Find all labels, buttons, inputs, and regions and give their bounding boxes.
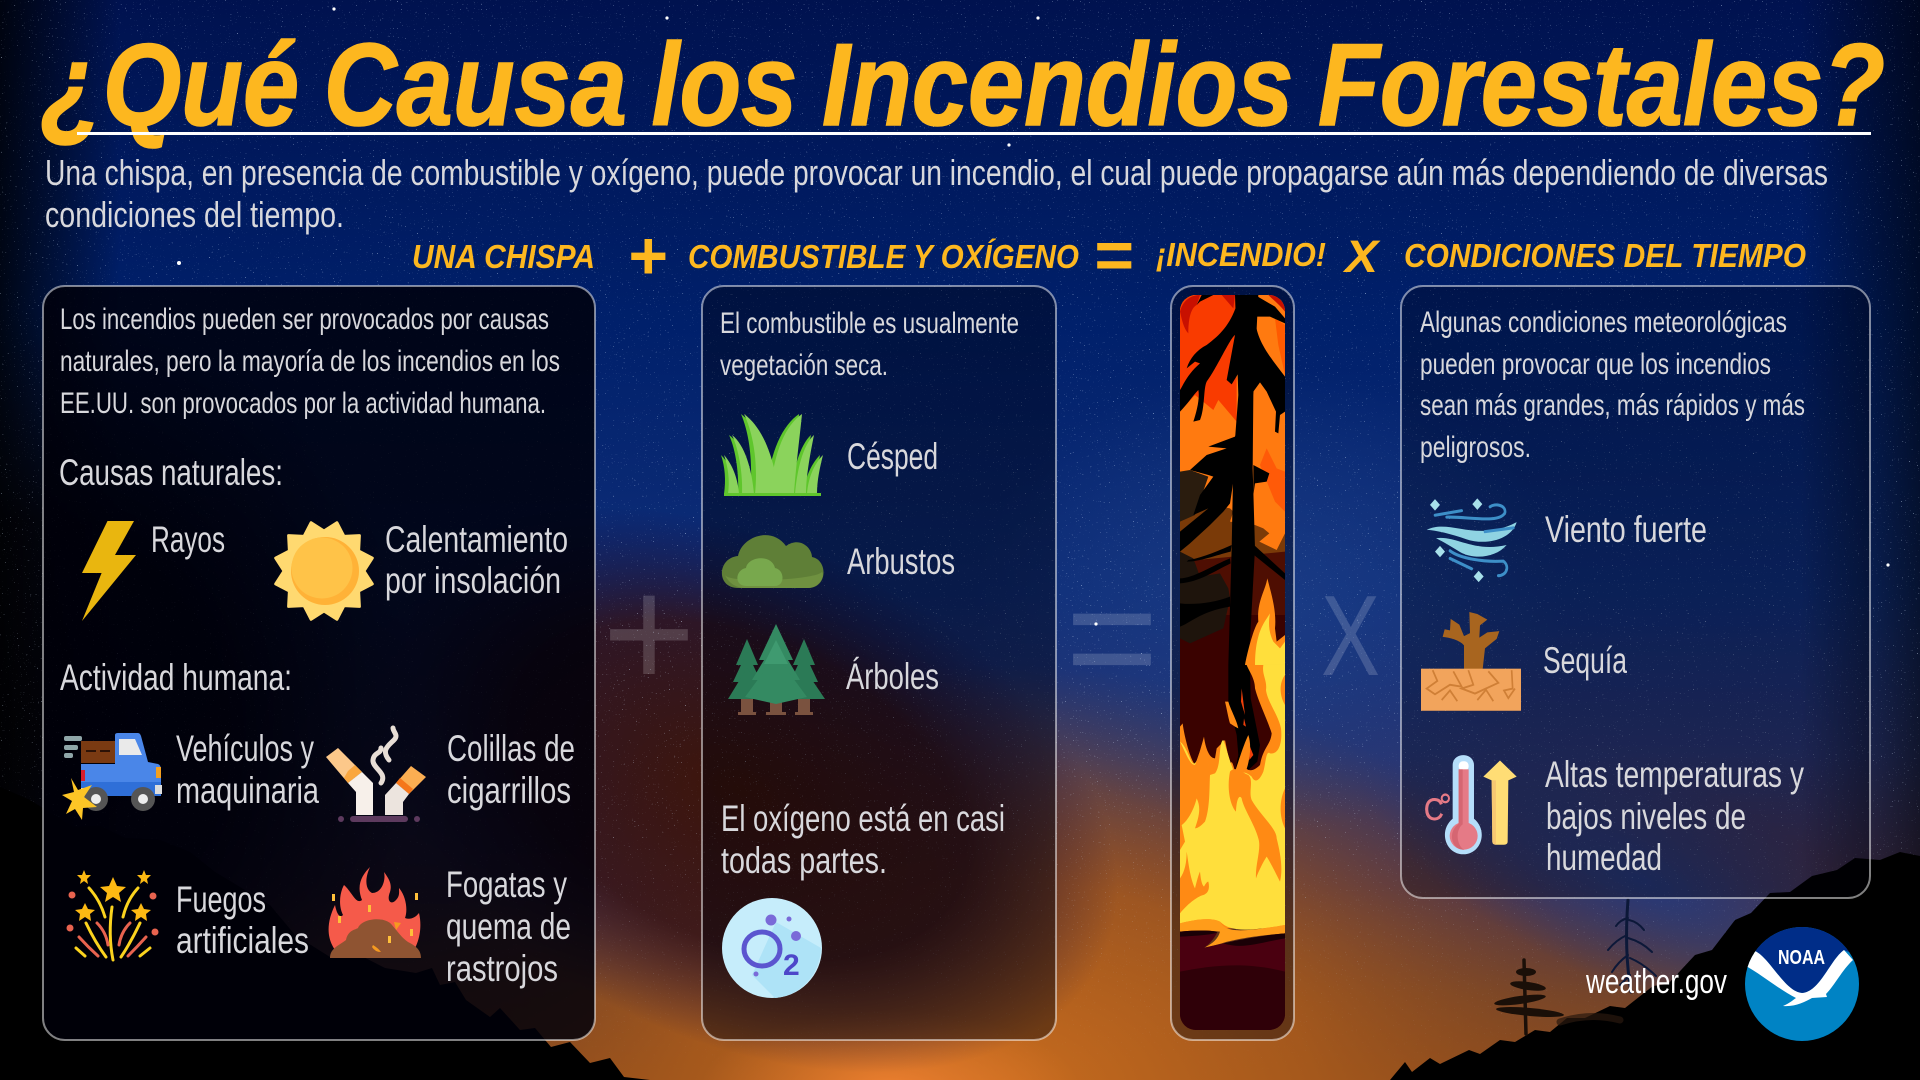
label: sequía: Sequía	[1543, 640, 1627, 681]
weather paragraph: pueden provocar que los incendios	[1420, 348, 1771, 381]
label: fuegos artificiales	[176, 879, 309, 961]
equation heading row: X	[1342, 231, 1381, 282]
label: fuegos artificiales: Fuegos	[176, 879, 266, 920]
weather paragraph: Algunas condiciones meteorológicas	[1420, 306, 1787, 339]
fuel paragraph: El combustible es usualmente	[720, 307, 1019, 340]
icon: burning debris pile	[329, 867, 421, 958]
icon: wind	[1427, 498, 1517, 582]
label: altas temperaturas y bajos niveles de humedad	[1545, 754, 1804, 878]
intro paragraph: causes	[60, 303, 560, 420]
logo: NOAA	[1740, 927, 1862, 1041]
heading: actividad humana: Actividad humana:	[60, 657, 292, 698]
label: vehículos y maquinaria: Vehículos y	[176, 728, 314, 769]
mountain silhouettes	[0, 787, 1920, 1080]
icon: oxygen molecule: 2	[783, 949, 800, 982]
panel: combustible y oxígeno	[702, 286, 1056, 1040]
website label: weather.gov	[1585, 963, 1727, 1001]
intro paragraph: causes: Los incendios pueden ser provocados por causas	[60, 303, 549, 336]
icon: sun	[276, 523, 372, 619]
heading: causas naturales: Causas naturales:	[59, 452, 283, 493]
label: viento fuerte: Viento fuerte	[1545, 509, 1707, 550]
icon: cigarette butts	[326, 728, 426, 822]
icon: thermometer and arrow: C	[1424, 792, 1444, 827]
intro paragraph: causes: naturales, pero la mayoría de los incendios en los	[60, 345, 560, 378]
icon: oxygen molecule	[722, 898, 822, 998]
large equals sign between panels: =	[1065, 547, 1159, 726]
intro paragraph: causes: EE.UU. son provocados por la actividad humana.	[60, 387, 546, 420]
icon: thermometer and arrow	[1424, 755, 1517, 854]
large plus sign between panels: +	[602, 543, 696, 722]
oxygen paragraph	[721, 798, 1005, 881]
label: colillas de cigarrillos: cigarrillos	[447, 770, 571, 811]
title underline	[77, 132, 1871, 135]
label: altas temperaturas y bajos niveles de humedad: humedad	[1546, 837, 1662, 878]
logo: NOAA: NOAA	[1778, 947, 1825, 969]
icon: grass	[721, 414, 823, 496]
label: altas temperaturas y bajos niveles de humedad: Altas temperaturas y	[1545, 754, 1804, 795]
equation heading row: CONDICIONES DEL TIEMPO	[1404, 237, 1806, 274]
panel: condiciones del tiempo	[1401, 286, 1870, 898]
tree: right snag	[1608, 900, 1656, 992]
equation heading row: COMBUSTIBLE Y OXÍGENO	[688, 238, 1079, 275]
label: árboles: Árboles	[846, 656, 939, 697]
weather paragraph	[1420, 306, 1805, 464]
icon: drought	[1421, 612, 1521, 711]
label: altas temperaturas y bajos niveles de humedad: bajos niveles de	[1546, 796, 1746, 837]
icon: trees	[728, 624, 825, 715]
label: calentamiento por insolación: por insolación	[385, 560, 561, 601]
fuel paragraph	[720, 307, 1019, 382]
oxygen paragraph: todas partes.	[721, 840, 887, 881]
label: calentamiento por insolación: Calentamiento	[385, 519, 568, 560]
weather paragraph: peligrosos.	[1420, 431, 1531, 464]
fire and burning tree illustration	[1180, 295, 1285, 1035]
label: colillas de cigarrillos: Colillas de	[447, 728, 575, 769]
equation heading row: UNA CHISPA	[412, 238, 595, 275]
intro text: condiciones del tiempo.	[45, 194, 344, 235]
label: arbustos: Arbustos	[847, 541, 955, 582]
oxygen paragraph: El oxígeno está en casi	[721, 798, 1005, 839]
tree: left pine	[1494, 960, 1564, 1034]
label: rayos: Rayos	[151, 519, 225, 560]
label: calentamiento por insolación	[385, 519, 568, 601]
label: césped: Césped	[847, 436, 938, 477]
label: vehículos y maquinaria	[176, 728, 319, 811]
label: vehículos y maquinaria: maquinaria	[176, 770, 319, 811]
icon: lightning	[82, 521, 136, 621]
label: fogatas y quema de rastrojos: rastrojos	[446, 948, 558, 989]
icon: truck	[62, 733, 162, 820]
equation heading row: ¡INCENDIO!	[1156, 236, 1326, 273]
label: fuegos artificiales: artificiales	[176, 920, 309, 961]
equation heading row: +	[627, 218, 667, 294]
label: colillas de cigarrillos	[447, 728, 575, 811]
icon: shrubs	[722, 535, 824, 588]
fuel paragraph: vegetación seca.	[720, 349, 888, 382]
label: fogatas y quema de rastrojos: Fogatas y	[446, 864, 567, 905]
panel: una chispa causes	[43, 286, 595, 1040]
sparse tree silhouettes	[1494, 900, 1656, 1034]
large multiply sign between panels: X	[1321, 573, 1380, 700]
label: fogatas y quema de rastrojos: quema de	[446, 906, 571, 947]
weather paragraph: sean más grandes, más rápidos y más	[1420, 389, 1805, 422]
intro text	[45, 152, 1828, 235]
equation heading row	[412, 217, 1806, 294]
panel: incendio illustration	[1171, 286, 1294, 1040]
equation heading row: =	[1093, 217, 1133, 293]
label: fogatas y quema de rastrojos	[446, 864, 571, 989]
icon: fireworks	[66, 870, 158, 960]
